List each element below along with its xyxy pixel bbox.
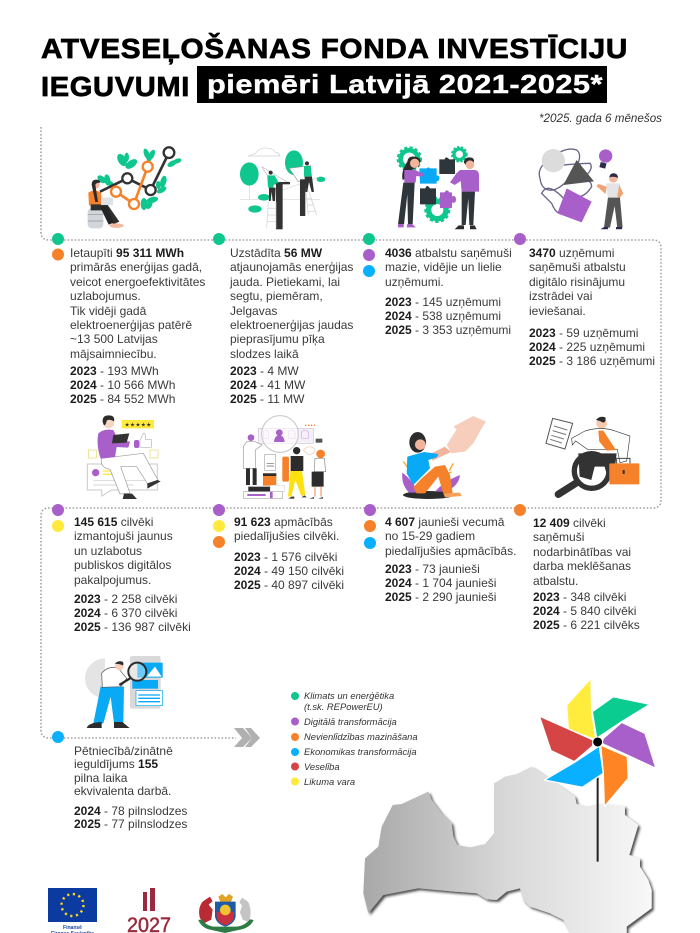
text: employment support: saņēmuši: [533, 530, 584, 544]
text: digital solutions: izstrādei vai: [529, 289, 592, 303]
text: public digital services: 2023 - 2 258 cilvēki: [74, 592, 177, 606]
text: renewable energy: Jelgavas: [230, 304, 277, 318]
text: employment support: 2023 - 348 cilvēki: [533, 590, 626, 604]
text: research: 2024 - 78 pilnslodzes: [74, 804, 187, 818]
illustration: digital solutions: [539, 149, 623, 229]
text: public digital services: [74, 515, 191, 634]
text: energy savings: Ietaupīti 95 311 MWh: [70, 246, 184, 260]
text: digital solutions: saņēmuši atbalstu: [529, 260, 626, 274]
text: training participants: piedalījušies cilvēki.: [234, 529, 339, 543]
text: renewable energy: 2024 - 41 MW: [230, 378, 305, 392]
footnote: *2025. gada 6 mēnešos: [539, 111, 662, 125]
map of Latvia: [363, 767, 652, 933]
text: energy savings: Tik vidēji gadā: [70, 304, 146, 318]
pinwheel: [539, 678, 656, 862]
illustration: training participants: [243, 416, 326, 499]
text: renewable energy: pieprasījumu pīķa: [230, 332, 325, 346]
text: employment support: 2025 - 6 221 cilvēks: [533, 618, 640, 632]
legend: Veselība: [304, 761, 340, 772]
text: employment support: darba meklēšanas: [533, 559, 631, 573]
illustration: public digital services: [87, 415, 161, 499]
text: employment support: atbalstu.: [533, 574, 578, 588]
legend: Ekonomikas transformācija: [304, 746, 417, 757]
text: training participants: 2023 - 1 576 cilvēki: [234, 550, 337, 564]
text: renewable energy: [230, 246, 353, 406]
text: enterprises supported: uzņēmumi.: [385, 275, 444, 289]
text: youth training: 2023 - 73 jaunieši: [385, 562, 480, 576]
text: research: pilna laika: [74, 771, 127, 785]
text: renewable energy: Uzstādīta 56 MW: [230, 246, 322, 260]
legend: [304, 690, 418, 787]
text: enterprises supported: 4036 atbalstu saņēmuši: [385, 246, 512, 260]
text: youth training: [385, 515, 516, 604]
text: youth training: 2024 - 1 704 jaunieši: [385, 576, 496, 590]
illustration: solar panels: [240, 148, 325, 229]
illustration: youth helping hand: [402, 416, 486, 499]
text: research: ieguldījums 155: [74, 757, 158, 771]
text: renewable energy: slodzes laikā: [230, 347, 299, 361]
text: research: [74, 744, 187, 831]
text: digital solutions: ieviešanai.: [529, 304, 586, 318]
text: public digital services: izmantojuši jaunus: [74, 529, 173, 543]
text: digital solutions: 2023 - 59 uzņēmumi: [529, 326, 638, 340]
logo: EU: [48, 888, 97, 933]
text: employment support: 12 409 cilvēki: [533, 516, 606, 530]
text: digital solutions: 2024 - 225 uzņēmumi: [529, 340, 645, 354]
text: public digital services: 2025 - 136 987 cilvēki: [74, 620, 191, 634]
text: enterprises supported: mazie, vidējie un lielie: [385, 260, 502, 274]
illustration: public digital services: ★★★★★: [125, 422, 152, 429]
text: enterprises supported: 2024 - 538 uzņēmumi: [385, 309, 501, 323]
illustration: energy savings: [88, 147, 182, 228]
title: ATVESEĻOŠANAS FONDA INVESTĪCIJU: [41, 32, 628, 64]
text: renewable energy: 2023 - 4 MW: [230, 364, 299, 378]
legend dots: [291, 692, 299, 786]
text: digital solutions: [529, 246, 655, 368]
text: energy savings: ~13 500 Latvijas: [70, 332, 158, 346]
text: research: 2025 - 77 pilnslodzes: [74, 817, 187, 831]
arrow: chevrons: [234, 728, 260, 747]
illustration: job seeking: [546, 417, 639, 494]
text: renewable energy: jauda. Pietiekami, lai: [230, 275, 340, 289]
text: research: Pētniecībā/zinātnē: [74, 744, 173, 758]
text: energy savings: 2023 - 193 MWh: [70, 364, 159, 378]
legend: Klimats un enerģētika: [304, 690, 394, 701]
text: energy savings: elektroenerģijas patērē: [70, 318, 192, 332]
text: training participants: 91 623 apmācībās: [234, 515, 333, 529]
title: [41, 32, 628, 103]
text: employment support: 2024 - 5 840 cilvēki: [533, 604, 636, 618]
text: energy savings: veicot energoefektivitātes: [70, 275, 205, 289]
text: public digital services: publiskos digitālos: [74, 558, 171, 572]
text: youth training: piedalījušies apmācībās.: [385, 544, 516, 558]
category dot row 3: [52, 731, 64, 743]
legend: Digitālā transformācija: [304, 716, 397, 727]
text: employment support: [533, 516, 640, 632]
text: youth training: 4 607 jaunieši vecumā: [385, 515, 504, 529]
text: digital solutions: 3470 uzņēmumi: [529, 246, 614, 260]
text: renewable energy: elektroenerģijas jaudas: [230, 318, 353, 332]
text: enterprises supported: [385, 246, 512, 337]
text: energy savings: [70, 246, 205, 406]
logo: coat of arms: [198, 894, 254, 933]
text: enterprises supported: 2023 - 145 uzņēmumi: [385, 295, 501, 309]
text: employment support: nodarbinātības vai: [533, 545, 631, 559]
title: IEGUVUMI: [41, 71, 190, 102]
legend: (t.sk. REPowerEU): [304, 701, 383, 712]
text: youth training: no 15-29 gadiem: [385, 529, 475, 543]
logo: Latvija 2027: [127, 888, 171, 933]
text: renewable energy: 2025 - 11 MW: [230, 392, 304, 406]
legend: Likuma vara: [304, 776, 355, 787]
text: energy savings: mājsaimniecību.: [70, 347, 157, 361]
legend: Nevienlīdzības mazināšana: [304, 731, 418, 742]
text: public digital services: 2024 - 6 370 cilvēki: [74, 606, 177, 620]
text: training participants: 2024 - 49 150 cilvēki: [234, 564, 344, 578]
text: energy savings: 2024 - 10 566 MWh: [70, 378, 175, 392]
text: digital solutions: 2025 - 3 186 uzņēmumi: [529, 354, 655, 368]
text: renewable energy: atjaunojamās enerģijas: [230, 260, 353, 274]
illustration: puzzle team: [398, 147, 479, 229]
text: digital solutions: digitālo risinājumu: [529, 275, 625, 289]
text: public digital services: 145 615 cilvēki: [74, 515, 153, 529]
text: renewable energy: segtu, piemēram,: [230, 289, 323, 303]
title: piemēri Latvijā 2021-2025*: [207, 69, 604, 99]
text: energy savings: primārās enerģijas gadā,: [70, 260, 202, 274]
text: training participants: [234, 515, 344, 592]
text: youth training: 2025 - 2 290 jaunieši: [385, 590, 496, 604]
text: research: ekvivalenta darbā.: [74, 784, 171, 798]
text: energy savings: uzlabojumus.: [70, 289, 141, 303]
text: energy savings: 2025 - 84 552 MWh: [70, 392, 175, 406]
category dots row 1: [52, 233, 526, 277]
category dots row 2: [52, 504, 526, 549]
text: public digital services: un uzlabotus: [74, 544, 142, 558]
text: public digital services: pakalpojumus.: [74, 573, 151, 587]
text: enterprises supported: 2025 - 3 353 uzņēmumi: [385, 323, 511, 337]
illustration: research: [85, 656, 163, 728]
text: training participants: 2025 - 40 897 cilvēki: [234, 578, 344, 592]
logo: EU: Finansē: [63, 925, 82, 931]
dotted timeline: [41, 127, 661, 738]
